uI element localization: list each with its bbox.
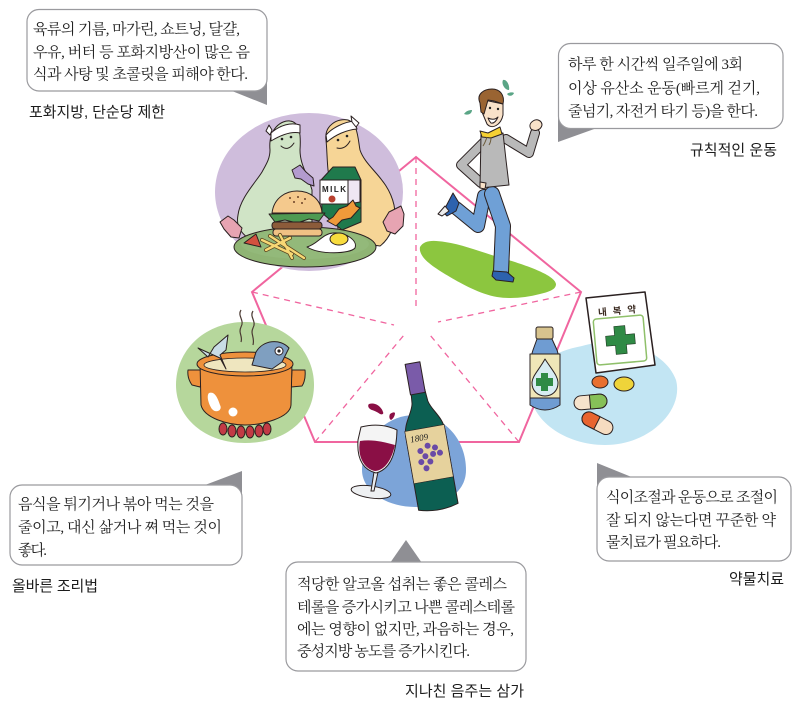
callout text: 줄넘기, 자전거 타기 등)을 한다. xyxy=(568,102,758,120)
callout text: 잘 되지 않는다면 꾸준한 약 xyxy=(606,511,776,529)
callout: cooking xyxy=(10,471,242,565)
pentagon diagram xyxy=(252,157,581,442)
heading: medication: 약물치료 xyxy=(729,571,784,588)
callout text: 육류의 기름, 마가린, 쇼트닝, 달걀, xyxy=(33,20,240,38)
callout: exercise xyxy=(558,44,783,142)
callout text: 좋다. xyxy=(18,541,47,559)
heading: exercise: 규칙적인 운동 xyxy=(690,142,777,159)
milk label: MILK xyxy=(322,185,346,194)
callout text: 중성지방 농도를 증가시킨다. xyxy=(297,642,470,660)
callout text: 음식을 튀기거나 볶아 먹는 것을 xyxy=(18,495,214,513)
illustration: food xyxy=(215,113,404,271)
callout text: 물치료가 필요하다. xyxy=(606,533,721,551)
callout text: 줄이고, 대신 삶거나 쪄 먹는 것이 xyxy=(18,518,222,536)
callout text: 하루 한 시간씩 일주일에 3회 xyxy=(568,55,743,73)
illustration: runner xyxy=(420,80,556,298)
heading: saturated fat: 포화지방, 단순당 제한 xyxy=(29,104,165,121)
callout text: 이상 유산소 운동(빠르게 걷기, xyxy=(568,79,760,97)
callout: medication xyxy=(597,463,791,561)
callout: alcohol xyxy=(286,540,526,671)
callout text: 우유, 버터 등 포화지방산이 많은 음 xyxy=(33,43,250,61)
heading: alcohol: 지나친 음주는 삼가 xyxy=(405,683,524,700)
wine label: 1809 xyxy=(409,432,429,445)
illustration: wine xyxy=(350,360,466,513)
callout text: 식과 사탕 및 초콜릿을 피해야 한다. xyxy=(33,65,248,83)
callout text: 테롤을 증가시키고 나쁜 콜레스테롤 xyxy=(297,598,516,616)
callout text: 식이조절과 운동으로 조절이 xyxy=(606,488,778,506)
packet label: 내복약 xyxy=(598,303,637,319)
callout: saturated fat xyxy=(27,10,267,105)
heading: cooking: 올바른 조리법 xyxy=(12,578,98,595)
callout text: 에는 영향이 없지만, 과음하는 경우, xyxy=(297,620,514,638)
illustration: medicine xyxy=(530,292,677,445)
illustration: pot xyxy=(176,310,314,443)
callout text: 적당한 알코올 섭취는 좋은 콜레스 xyxy=(297,575,508,593)
